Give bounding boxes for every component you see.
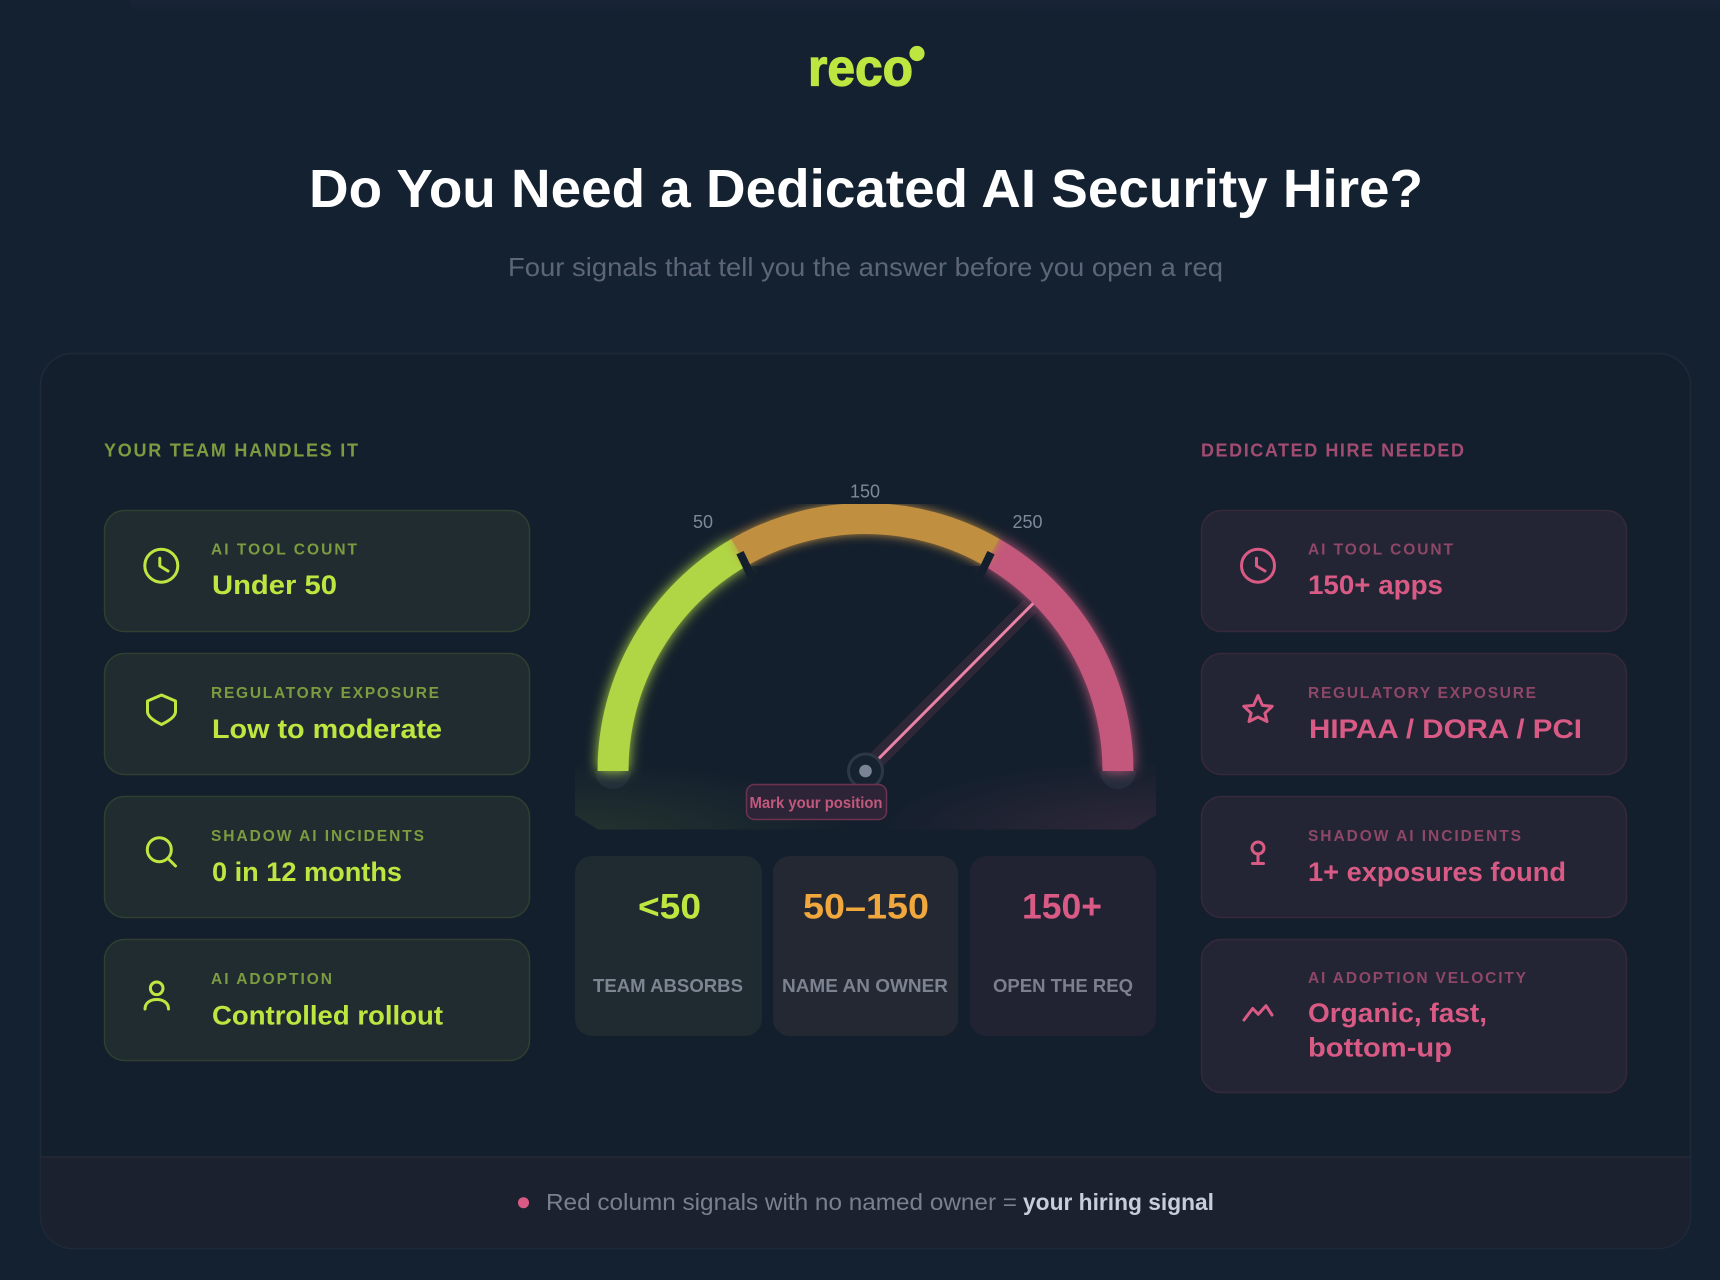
right card: AI tool count: AI TOOL COUNT: [1308, 542, 1454, 558]
stat card: name an owner: NAME AN OWNER: [782, 976, 948, 996]
right card: shadow AI incidents: [1202, 796, 1626, 918]
left card: AI tool count: Under 50: [212, 570, 337, 600]
gauge arc: amber zone: [739, 519, 992, 552]
stat card: open the req: OPEN THE REQ: [993, 976, 1133, 996]
left card: regulatory exposure: [104, 654, 530, 774]
subtitle: Four signals that tell you the answer before you open a req: [508, 252, 1223, 282]
icon: star: [1244, 696, 1272, 722]
footer bar: your hiring signal: [1023, 1189, 1214, 1215]
right card: AI adoption velocity: bottom-up: [1308, 1032, 1452, 1062]
icon: zigzag trend: [1244, 1006, 1272, 1020]
scale labels: [693, 482, 1043, 532]
stat card: open the req: [970, 856, 1156, 1036]
right card: shadow AI incidents: SHADOW AI INCIDENTS: [1308, 828, 1521, 845]
icon: magnifier: [147, 838, 176, 866]
left card: AI tool count: AI TOOL COUNT: [211, 542, 358, 558]
left card: shadow AI incidents: [104, 796, 530, 918]
scale labels: 150: [850, 482, 880, 502]
stat card: team absorbs: TEAM ABSORBS: [593, 976, 743, 996]
right card: regulatory exposure: HIPAA / DORA / PCI: [1309, 714, 1582, 744]
icon: person: [145, 982, 168, 1009]
main panel: [40, 354, 1690, 1248]
icon: shield: [148, 695, 176, 724]
icon: clock: [1242, 549, 1274, 582]
tick marks: [740, 553, 991, 577]
icon: clock: [145, 549, 178, 582]
callout: mark your position: Mark your position: [750, 795, 882, 812]
left card: AI tool count: [104, 510, 530, 632]
left card: regulatory exposure: Low to moderate: [212, 714, 442, 744]
stat card: name an owner: [773, 856, 958, 1036]
stat card: open the req: 150+: [1022, 888, 1102, 926]
footer bar: [41, 1156, 1690, 1248]
right card: AI tool count: 150+ apps: [1308, 570, 1443, 600]
right card: AI tool count: [1202, 510, 1626, 632]
right card: AI adoption velocity: [1202, 940, 1626, 1092]
right card: AI adoption velocity: Organic, fast,: [1308, 998, 1487, 1028]
gauge floor glow: [575, 762, 1156, 830]
stat card: team absorbs: <50: [638, 888, 701, 926]
left card: shadow AI incidents: SHADOW AI INCIDENTS: [211, 828, 424, 845]
stat card: name an owner: 50–150: [803, 888, 929, 926]
left card: shadow AI incidents: 0 in 12 months: [212, 857, 402, 887]
left card: regulatory exposure: REGULATORY EXPOSURE: [211, 685, 439, 702]
left column heading: YOUR TEAM HANDLES IT: [104, 440, 358, 460]
scale labels: 250: [1012, 512, 1043, 532]
callout: mark your position: [746, 784, 886, 820]
logo: reco: reco: [808, 40, 913, 98]
gauge: [575, 482, 1156, 830]
title: Do You Need a Dedicated AI Security Hire?: [309, 159, 1423, 219]
right card: regulatory exposure: [1202, 654, 1626, 774]
right card: shadow AI incidents: 1+ exposures found: [1308, 857, 1566, 887]
left card: AI adoption: Controlled rollout: [212, 1000, 443, 1030]
left card: AI adoption: [104, 940, 530, 1060]
icon: pin: [1252, 842, 1264, 864]
right column heading: DEDICATED HIRE NEEDED: [1201, 440, 1464, 460]
needle pivot: [848, 754, 882, 788]
right card: regulatory exposure: REGULATORY EXPOSURE: [1308, 685, 1536, 702]
scale labels: 50: [693, 512, 713, 532]
left card: AI adoption: AI ADOPTION: [211, 971, 332, 988]
footer bar: Red column signals with no named owner =: [546, 1189, 1017, 1215]
gauge arc: pink zone: [992, 552, 1118, 771]
gauge arc: green zone: [613, 552, 739, 771]
right card: AI adoption velocity: AI ADOPTION VELOCITY: [1308, 970, 1527, 987]
stat card: team absorbs: [575, 856, 762, 1036]
needle: [866, 603, 1033, 771]
